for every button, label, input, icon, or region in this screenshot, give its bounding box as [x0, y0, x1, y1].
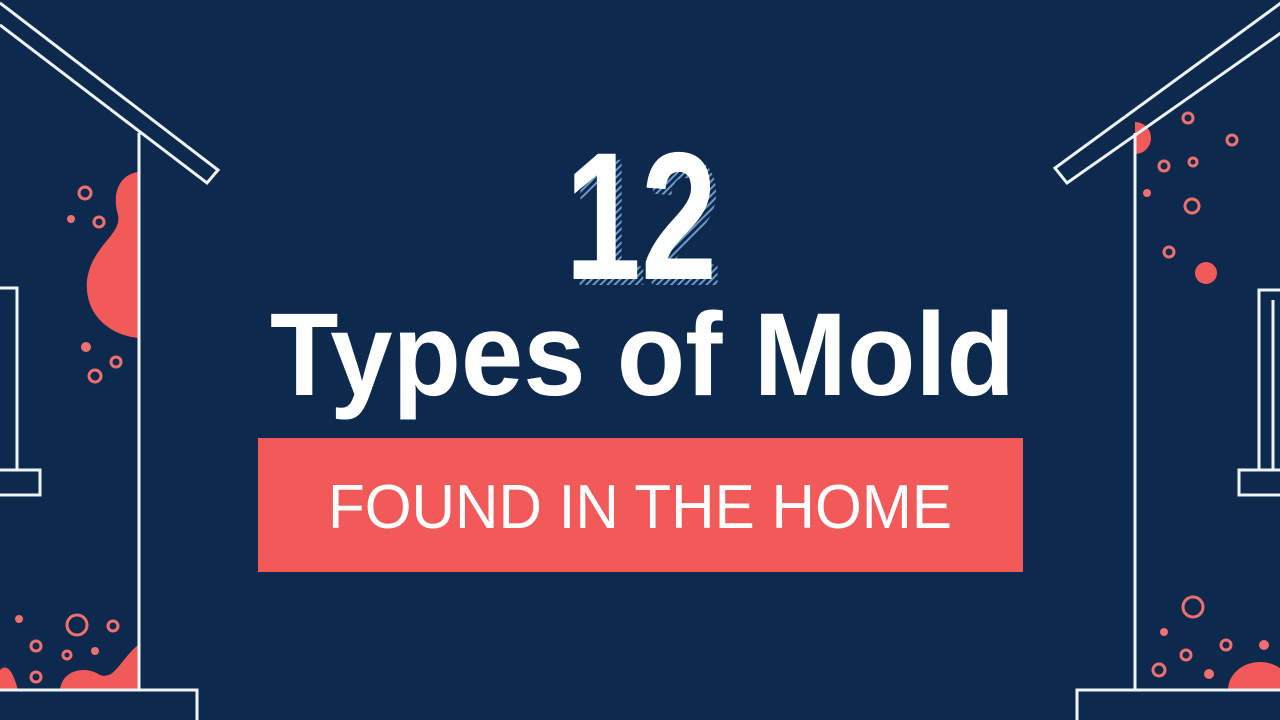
title: Types of Mold: Types of Mold [270, 289, 1015, 421]
left mold blobs [0, 172, 138, 690]
left house illustration [0, 3, 218, 720]
number 12: 12 [565, 114, 717, 318]
subtitle banner [258, 438, 1023, 572]
right house illustration [1055, 0, 1280, 720]
right mold spots [1135, 122, 1280, 690]
subtitle banner: FOUND IN THE HOME [328, 473, 952, 542]
number 12: 12 [571, 120, 723, 324]
